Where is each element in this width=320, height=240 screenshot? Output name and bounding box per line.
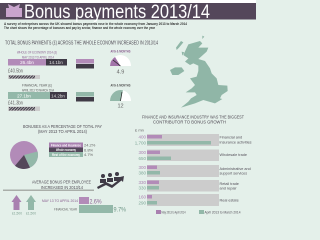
- pie legend: Whole economy: [56, 148, 76, 152]
- chart: bonus growth: 9.7%: [114, 208, 127, 214]
- chart legend: May 2013 to April 2014: [162, 210, 186, 214]
- arrow labels: [12, 212, 36, 216]
- intro text: [4, 22, 187, 30]
- pie legend: 24.2%: [84, 142, 96, 148]
- bar values: 300: [138, 165, 146, 170]
- title: Bonus payments 2013/14: [24, 2, 210, 23]
- bar: financial year: 27.1bn: [17, 94, 31, 98]
- chart: bonus growth: MAY 13 TO APRIL 2014: [42, 199, 78, 203]
- gauge: 12: [117, 104, 124, 110]
- gauge: [110, 50, 131, 76]
- chart legend: [156, 210, 241, 214]
- bar: whole economy: 26.4bn: [20, 60, 34, 65]
- pie legend: Rest of the economy: [52, 153, 80, 157]
- bar: financial year: [8, 92, 67, 99]
- gauge: AVG & MONTHS: [110, 84, 131, 88]
- bar values: [135, 134, 146, 206]
- legend: [76, 92, 94, 102]
- pie legend: [49, 142, 96, 157]
- heading: average bonus per employee: [32, 180, 91, 191]
- value: £40.5bn: [8, 68, 23, 74]
- heading: average bonus per employee: AVERAGE BONUS PER EMPLOYEE: [32, 180, 91, 186]
- bar values: 330: [138, 180, 146, 185]
- gauge: AVG & MONTHS: [110, 50, 131, 54]
- arrow: green: [26, 195, 36, 210]
- bar labels: Financial and: [220, 136, 242, 140]
- bar values: 160: [138, 194, 146, 200]
- icon: people and rising arrow: [97, 172, 124, 189]
- pie legend: 4.7%: [84, 152, 94, 157]
- gauge: [110, 84, 131, 110]
- heading: finance and insurance: CONTRIBUTOR TO BONUS GROWTH: [153, 120, 226, 126]
- panel: financial year: [8, 84, 131, 111]
- bar values: 1,700: [135, 140, 146, 146]
- bar labels: support services: [220, 172, 247, 176]
- bar labels: Retail trade: [220, 182, 239, 186]
- heading: bonuses as a percentage: (MAY 2013 TO APRIL 2014): [38, 129, 87, 135]
- heading: bonuses as a percentage: [23, 124, 103, 135]
- intro text: A survey of enterprises across the UK showed bonus payments rose in the whole economy from January 2013 to March 2014: [4, 22, 187, 26]
- heading: bonuses as a percentage: BONUSES AS A PERCENTAGE OF TOTAL PAY: [23, 124, 103, 130]
- heading: average bonus per employee: INCREASED IN 2013/14: [41, 185, 83, 191]
- pie legend: Finance and insurance: [51, 144, 81, 148]
- panel: whole economy: MAY 2013 TO APRIL 2014: [22, 56, 54, 60]
- bar values: 650: [138, 156, 146, 161]
- chart: bonus growth: [42, 197, 127, 214]
- bar labels: and repair: [220, 186, 237, 190]
- panel: whole economy: [8, 50, 131, 79]
- panel: whole economy: WHOLE OF ECONOMY 2014 (£): [17, 50, 57, 54]
- legend: [76, 59, 94, 68]
- arrow: purple: [12, 195, 22, 210]
- pie legend: 6.8%: [84, 148, 94, 152]
- bar: whole economy: 14.1bn: [49, 60, 63, 65]
- chart: industry bars: [135, 134, 252, 206]
- bar: whole economy: [8, 59, 67, 66]
- bar labels: Administrative and: [220, 167, 251, 171]
- bar labels: [220, 136, 252, 202]
- heading: total bonus payments: TOTAL BONUS PAYMENTS (£) ACROSS THE WHOLE ECONOMY INCREASED IN 2013/14: [5, 40, 158, 46]
- value: £41.3bn: [8, 100, 23, 106]
- title banner: [0, 2, 256, 23]
- intro text: The chart shows the percentage of bonuses and pay by sector, finance and the whole economy over the year: [4, 26, 156, 30]
- bar values: 330: [138, 186, 146, 190]
- map: UK: [170, 36, 228, 108]
- bar labels: Real estate: [220, 198, 239, 202]
- chart legend: April 2013 to March 2014: [204, 210, 241, 214]
- gauge: 4.9: [117, 70, 124, 76]
- heading: finance and insurance: [142, 114, 244, 126]
- bar values: 400: [138, 134, 146, 140]
- bar values: 290: [138, 200, 146, 206]
- hatched bar: [8, 106, 40, 111]
- bar labels: insurance activities: [220, 140, 252, 144]
- arrow labels: £1,500: [12, 212, 22, 216]
- panel: financial year: FINANCIAL YEAR (£): [22, 84, 52, 88]
- bar values: 380: [138, 170, 146, 176]
- bar labels: Wholesale trade: [220, 153, 247, 157]
- icon: gift: [6, 4, 22, 17]
- chart: bonus growth: FINANCIAL YEAR: [54, 208, 77, 212]
- hatched bar: [8, 75, 40, 79]
- bar: financial year: 14.2bn: [51, 94, 65, 98]
- pie chart: [10, 141, 38, 169]
- chart: bonus growth: 2.6%: [90, 200, 102, 206]
- bar values: 300: [138, 150, 146, 155]
- panel: financial year: APRIL 2013 TO MARCH 2014: [22, 88, 54, 92]
- arrow labels: £1,500: [26, 212, 36, 216]
- axis unit: £ mn: [135, 128, 144, 132]
